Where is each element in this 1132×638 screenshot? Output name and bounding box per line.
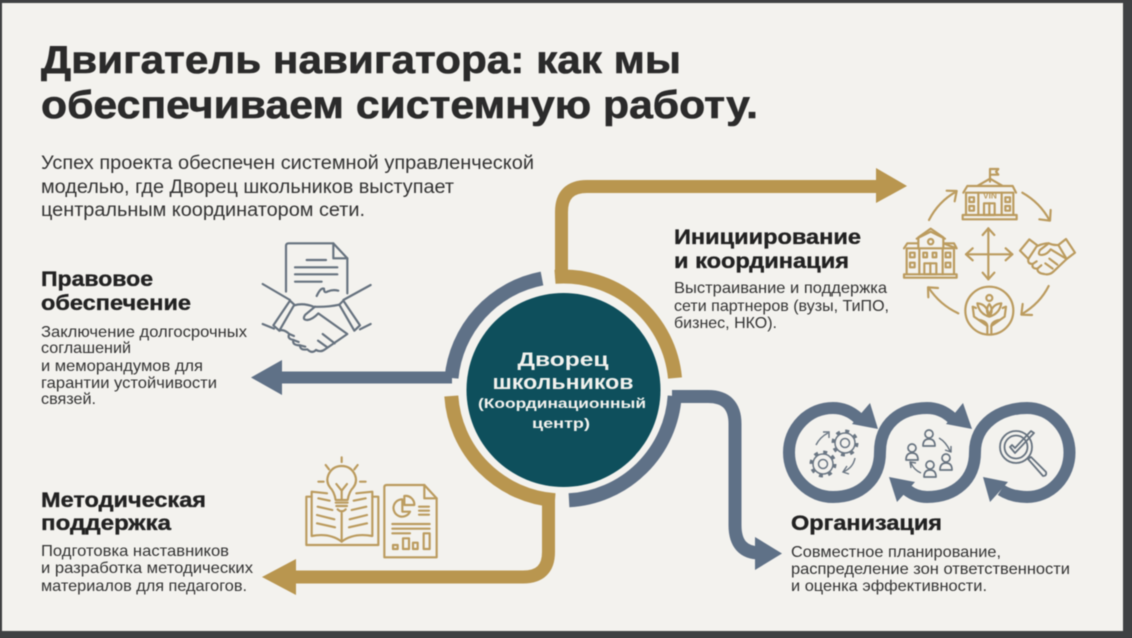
panel: legal support: гарантии устойчивости <box>41 375 217 392</box>
panel: legal support: и меморандумов для <box>41 358 203 375</box>
panel: methodical support: и разработка методических <box>41 560 253 577</box>
left building <box>904 229 957 278</box>
panel: organization <box>791 512 1070 595</box>
intro text: центральным координатором сети. <box>41 200 365 221</box>
panel: initiation and coordination: сети партнеров (вузы, ТиПО, <box>674 298 889 315</box>
title <box>41 39 758 127</box>
panel: initiation and coordination: Инициирование <box>674 226 861 249</box>
icon: cycle of partners <box>904 169 1075 335</box>
panel: legal support: обеспечение <box>41 292 191 315</box>
central circle <box>466 293 660 487</box>
gold arrow: methodical support <box>262 499 548 595</box>
panel: organization: Совместное планирование, <box>791 544 1001 561</box>
loop strokes <box>789 408 1070 497</box>
gold arrow: initiation <box>562 168 907 278</box>
intro text: Успех проекта обеспечен системной управленческой <box>41 153 534 174</box>
panel: methodical support: Подготовка наставников <box>41 543 229 560</box>
central circle: Дворец <box>518 349 609 371</box>
top building: VIN <box>983 191 997 201</box>
panel: initiation and coordination <box>674 226 889 332</box>
top building <box>963 169 1017 219</box>
central circle: школьников <box>492 372 634 394</box>
central circle: (Координационный <box>478 395 646 411</box>
icon: report document <box>384 485 437 557</box>
panel: initiation and coordination: и координация <box>674 250 849 273</box>
icon: contract and handshake <box>263 243 371 352</box>
panel: initiation and coordination: бизнес, НКО). <box>674 315 777 332</box>
title: Двигатель навигатора: как мы <box>41 39 681 82</box>
panel: methodical support: Методическая <box>41 489 206 512</box>
magnifier with check <box>1000 431 1046 476</box>
panel: initiation and coordination: Выстраивание и поддержка <box>674 280 887 297</box>
loop arrowheads <box>852 403 1008 502</box>
plant in hands <box>965 287 1013 335</box>
panel: legal support <box>41 268 247 408</box>
handshake <box>1020 239 1075 274</box>
panel: legal support: Правовое <box>41 268 153 291</box>
intro text <box>41 153 534 221</box>
panel: methodical support <box>41 489 253 595</box>
people in a cycle <box>906 430 952 477</box>
blue arrow: organization <box>672 396 782 570</box>
panel: organization: Организация <box>791 512 942 535</box>
central circle: центр) <box>532 415 590 431</box>
title: обеспечиваем системную работу. <box>41 84 758 127</box>
intro text: моделью, где Дворец школьников выступает <box>41 177 454 198</box>
blue arrow: legal support <box>251 360 452 395</box>
ring segments around the centre <box>451 276 675 500</box>
panel: legal support: Заключение долгосрочных <box>41 324 247 341</box>
gears <box>811 431 857 476</box>
panel: legal support: связей. <box>41 391 96 408</box>
centre four-way arrow <box>966 228 1012 279</box>
panel: organization: распределение зон ответственности <box>791 561 1070 578</box>
icon: book and lightbulb <box>306 457 378 545</box>
panel: legal support: соглашений <box>41 340 131 357</box>
panel: methodical support: материалов для педагогов. <box>41 578 247 595</box>
panel: methodical support: поддержка <box>41 512 171 535</box>
cycle arrows <box>928 191 1051 315</box>
panel: organization: и оценка эффективности. <box>791 578 987 595</box>
icon: infinity process loop <box>789 403 1070 502</box>
